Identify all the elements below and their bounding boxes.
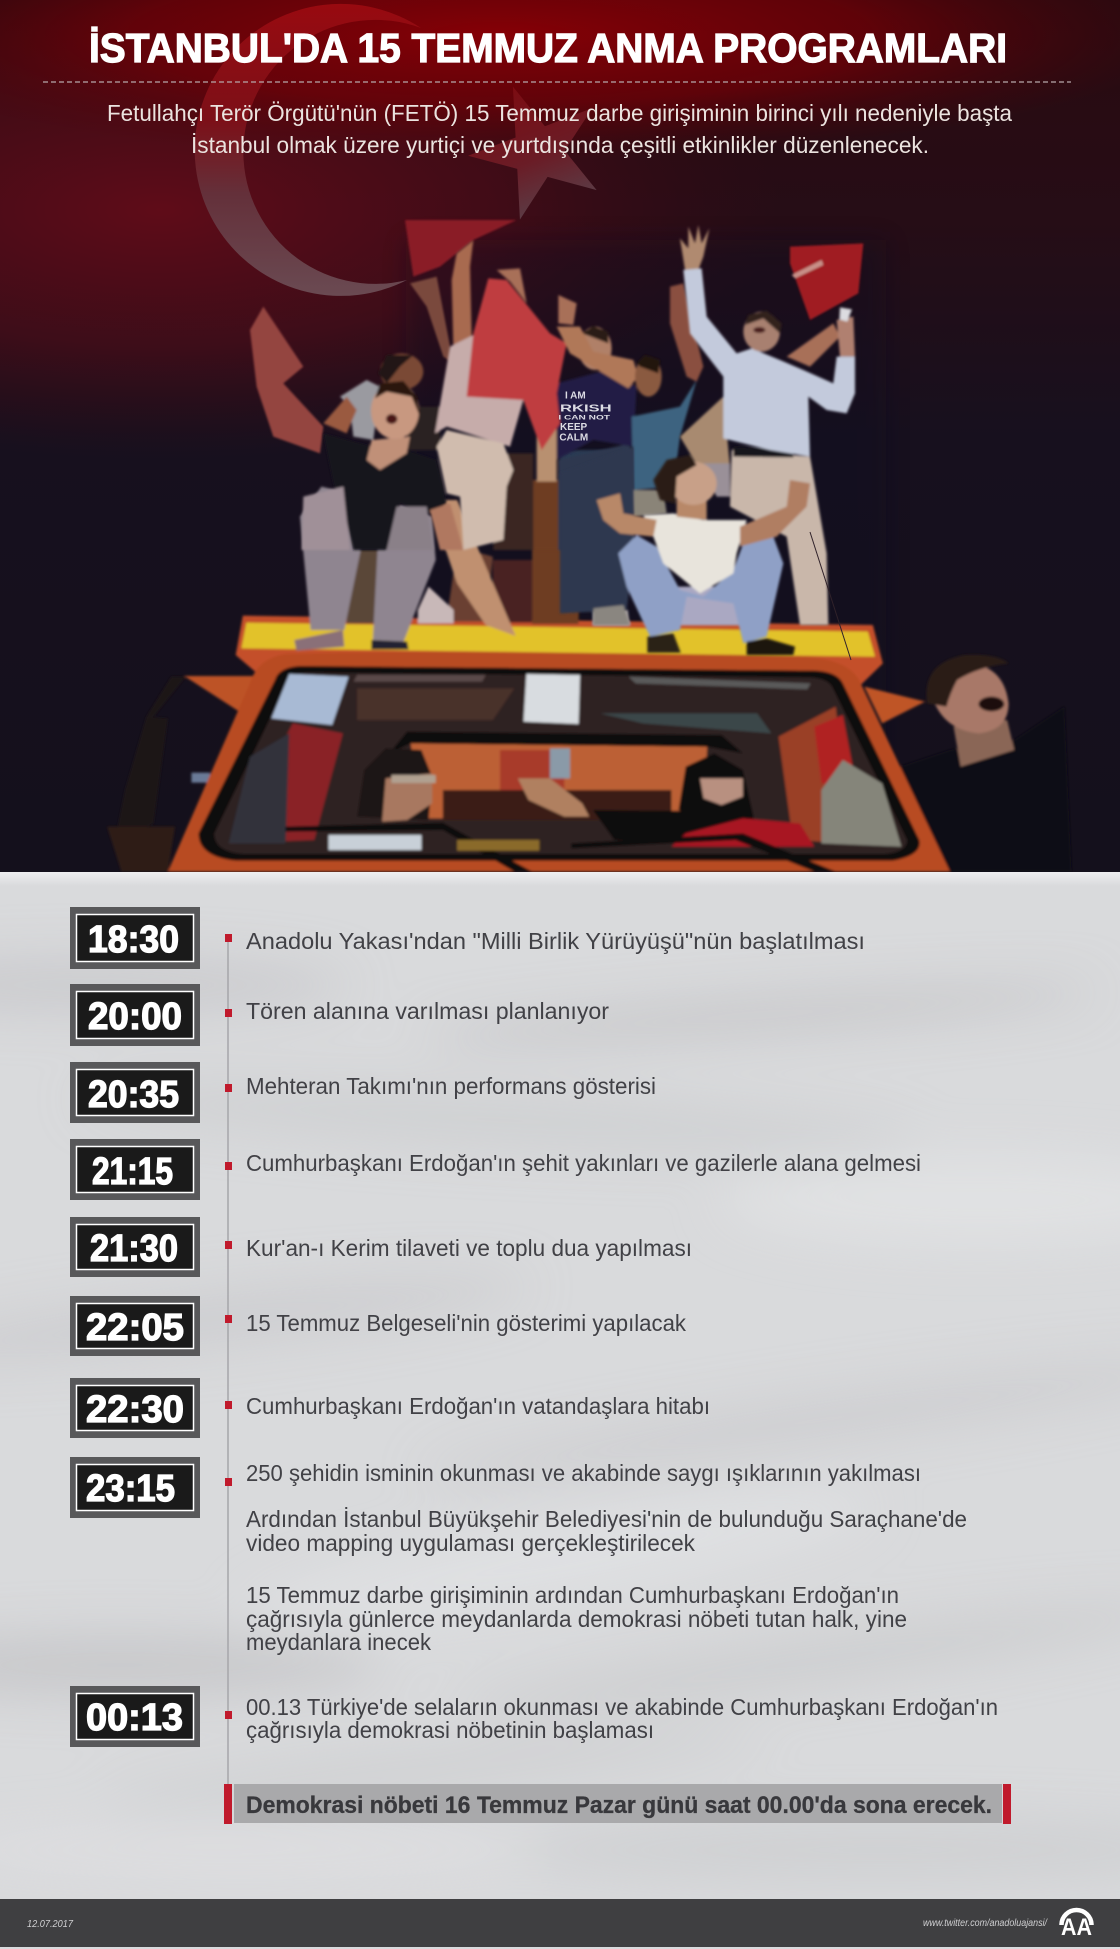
time badge 20:00 — [70, 984, 200, 1046]
time badge 20:35 — [70, 1062, 200, 1123]
item 20:35: Mehteran Takımı'nın performans gösterisi — [246, 1073, 656, 1099]
time badge 22:05: 22:05 — [86, 1307, 184, 1349]
source link: www.twitter.com/anadoluajansi/ — [923, 1918, 1048, 1929]
right woman — [679, 753, 754, 823]
shirt slogan: CALM — [559, 433, 588, 444]
icon: agency logo: AA — [1061, 1914, 1092, 1941]
white shirt — [683, 268, 855, 457]
footer bar — [0, 1899, 1120, 1949]
man 5 pants — [730, 450, 828, 625]
head — [743, 312, 780, 352]
icon: crescent — [195, 4, 421, 296]
man 2 arm — [452, 240, 473, 347]
under-group dark legs — [493, 453, 533, 550]
windshield — [199, 666, 920, 861]
item 23:15: Ardından İstanbul Büyükşehir Belediyesi'nin de bulunduğu Saraçhane'de — [246, 1506, 967, 1532]
time badge 23:15 — [70, 1457, 200, 1518]
icon: star — [468, 87, 596, 220]
lower legs standing behind — [446, 547, 493, 622]
wipers — [286, 823, 532, 872]
time badge 21:15 — [70, 1139, 200, 1200]
item 00:13: 00.13 Türkiye'de selaların okunması ve akabinde Cumhurbaşkanı Erdoğan'ın — [246, 1694, 998, 1720]
item 21:15: Cumhurbaşkanı Erdoğan'ın şehit yakınları ve gazilerle alana gelmesi — [246, 1150, 921, 1176]
item 21:30: Kur'an-ı Kerim tilaveti ve toplu dua yapılması — [246, 1235, 692, 1261]
item 20:00: Tören alanına varılması planlanıyor — [246, 998, 609, 1024]
people on the truck, left group — [302, 240, 703, 550]
time badge 21:30 — [70, 1217, 200, 1277]
flag in the middle — [467, 278, 567, 450]
callout: end of vigil: Demokrasi nöbeti 16 Temmuz Pazar günü saat 00.00'da sona erecek. — [246, 1792, 992, 1819]
time badge 23:15: 23:15 — [86, 1468, 175, 1510]
waving flag, upper right — [790, 243, 863, 320]
left pane with reds — [284, 722, 344, 843]
people on the truck, right group — [560, 225, 855, 655]
forearm and hand — [787, 323, 840, 367]
panel: hero photo background — [0, 0, 1120, 872]
man 3 jeans — [558, 443, 633, 550]
time badge 18:30 — [70, 907, 200, 969]
item 23:15 — [225, 1460, 967, 1655]
intro text — [107, 100, 1012, 158]
item 22:30: Cumhurbaşkanı Erdoğan'ın vatandaşlara hitabı — [246, 1393, 710, 1419]
cab — [168, 652, 950, 872]
man 1 upper legs — [302, 487, 350, 550]
shirt slogan — [558, 390, 612, 444]
jeans of the man on the left — [560, 447, 633, 613]
back man — [340, 380, 380, 440]
right side of cab — [776, 705, 838, 844]
boy head — [677, 497, 707, 520]
rear cabin window — [411, 743, 707, 818]
date: 12.07.2017 — [27, 1919, 73, 1930]
wire antenna — [810, 532, 851, 660]
time badge 22:30 — [70, 1378, 200, 1438]
time badge 22:05 — [70, 1296, 200, 1356]
timeline axis — [227, 938, 229, 1784]
man 1 shirt — [323, 433, 447, 550]
shirt slogan: I CAN NOT — [558, 414, 610, 421]
intro text: Fetullahçı Terör Örgütü'nün (FETÖ) 15 Temmuz darbe girişiminin birinci yılı nedeniyle başta — [107, 100, 1012, 126]
item 23:15: video mapping uygulaması gerçekleştirilecek — [246, 1530, 695, 1556]
shirt slogan: RKISH — [560, 404, 612, 415]
item 23:15: 250 şehidin isminin okunması ve akabinde saygı ışıklarının yakılması — [246, 1460, 921, 1486]
time badge 20:00: 20:00 — [88, 996, 182, 1038]
panel: grey schedule background — [0, 872, 1120, 1899]
man 2 pants — [437, 430, 513, 550]
item 18:30: Anadolu Yakası'ndan "Milli Birlik Yürüyüşü"nün başlatılması — [246, 928, 865, 954]
man 1 lower legs — [346, 550, 379, 623]
side mirror — [114, 717, 168, 843]
blurred flag and arm, upper left — [250, 220, 517, 453]
item 23:15: çağrısıyla günlerce meydanlarda demokrasi nöbeti tutan halk, yine — [246, 1606, 907, 1632]
boy jeans — [657, 587, 750, 625]
man 1 head — [371, 382, 419, 439]
intro text: İstanbul olmak üzere yurtiçi ve yurtdışında çeşitli etkinlikler düzenlenecek. — [191, 132, 929, 158]
time badge 00:13 — [70, 1686, 200, 1747]
item 23:15: meydanlara inecek — [246, 1629, 431, 1655]
time badge 00:13: 00:13 — [86, 1697, 183, 1739]
bystander man — [900, 707, 1071, 872]
shirt slogan: KEEP — [560, 422, 588, 433]
item 22:05: 15 Temmuz Belgeseli'nin gösterimi yapılacak — [246, 1310, 686, 1336]
man 4 plaid — [632, 380, 697, 490]
item 00:13 — [225, 1694, 998, 1743]
man behind — [680, 397, 730, 470]
time badge 18:30: 18:30 — [88, 919, 179, 961]
man 2 shirt — [435, 335, 523, 447]
shirt slogan: I AM — [565, 390, 586, 401]
arm and sleeve — [593, 810, 757, 840]
rack — [236, 616, 883, 685]
raised hand — [680, 225, 709, 270]
time badge 21:15: 21:15 — [92, 1151, 173, 1193]
truck and people inside — [107, 450, 1071, 872]
title: İSTANBUL'DA 15 TEMMUZ ANMA PROGRAMLARI — [89, 25, 1007, 71]
boy arms — [597, 493, 657, 537]
callout: end of vigil — [224, 1784, 1011, 1824]
man 3 head — [578, 327, 612, 370]
item 00:13: çağrısıyla demokrasi nöbetinin başlaması — [246, 1717, 654, 1743]
left woman — [357, 748, 432, 820]
boy tee — [643, 513, 747, 593]
boy shoes — [647, 633, 681, 653]
time badge 21:30: 21:30 — [90, 1228, 178, 1270]
signs on windshield — [271, 674, 349, 725]
red cloth — [671, 818, 814, 847]
time badge 20:35: 20:35 — [88, 1074, 179, 1116]
item 23:15: 15 Temmuz darbe girişiminin ardından Cumhurbaşkanı Erdoğan'ın — [246, 1582, 899, 1608]
man 3 shirt — [557, 370, 637, 460]
time badge 22:30: 22:30 — [86, 1389, 184, 1431]
